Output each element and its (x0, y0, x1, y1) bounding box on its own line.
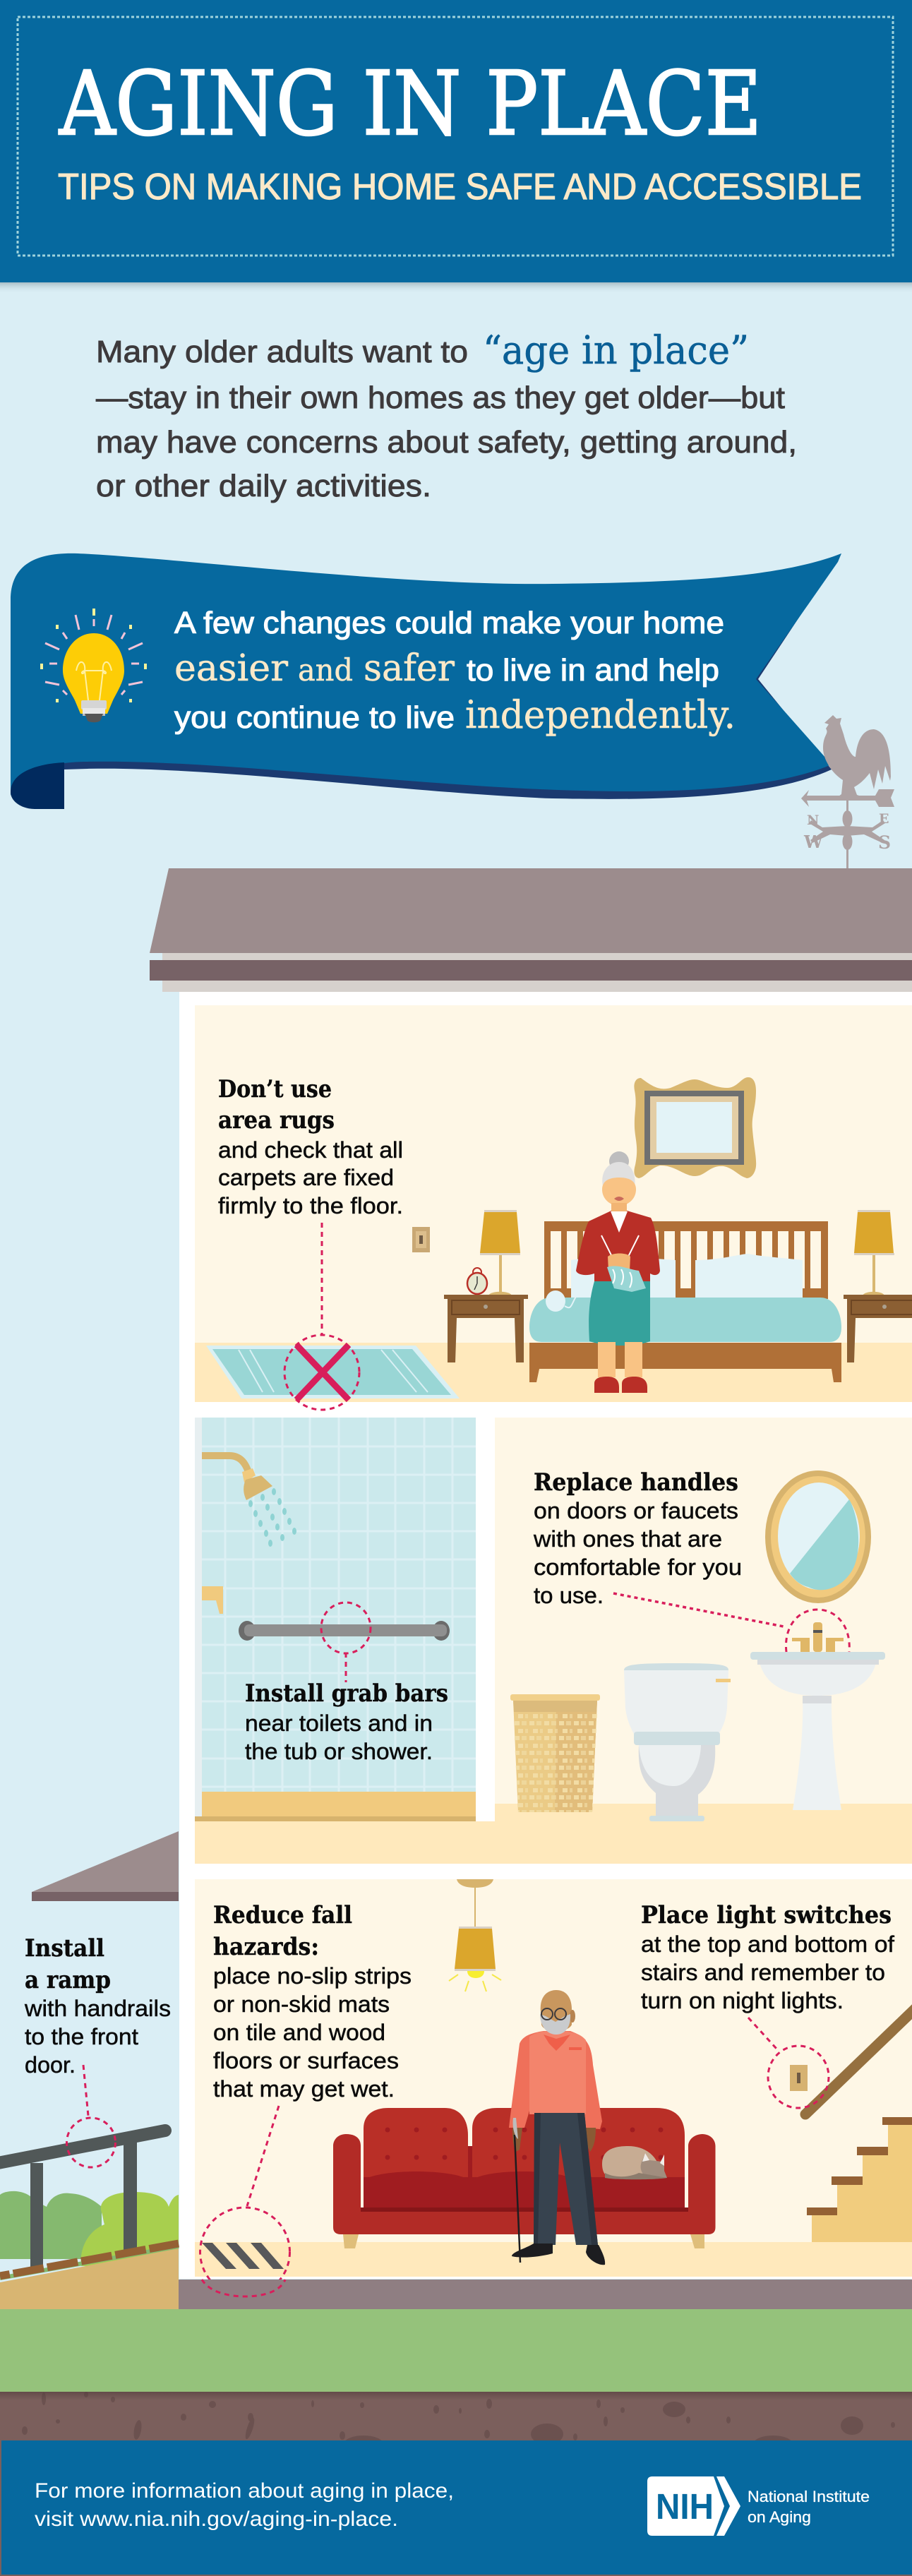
tip text: area rugs: firmly to the floor. (218, 1193, 403, 1218)
tip text: fall hazards: floors or surfaces (213, 2048, 399, 2073)
left lamp (480, 1210, 520, 1295)
tip text: light switches: Place light switches (641, 1901, 892, 1929)
tip text: fall hazards: on tile and wood (213, 2020, 385, 2045)
tip text: area rugs: and check that all (218, 1137, 403, 1163)
tip text: light switches: stairs and remember to (641, 1960, 885, 1985)
pedestal sink (750, 1622, 885, 1810)
tip text: light switches: at the top and bottom of (641, 1931, 894, 1957)
intro text block: —stay in their own homes as they get older—but (96, 381, 785, 415)
tip text: light switches: turn on night lights. (641, 1988, 844, 2013)
banner text: you continue to live (174, 700, 455, 735)
tip text: handles: with ones that are (533, 1526, 722, 1552)
weather vane: S (878, 832, 891, 853)
intro text block: may have concerns about safety, getting around, (96, 425, 797, 460)
icon: shower head (202, 1452, 296, 1547)
banner text: and (298, 653, 353, 688)
title: AGING IN PLACE (59, 53, 762, 155)
toilet (624, 1663, 731, 1821)
callout circle: stripes (200, 2207, 289, 2296)
intro text block: “age in place” (483, 328, 749, 373)
laundry hamper (510, 1694, 600, 1812)
tip text: grab bars (245, 1679, 448, 1764)
grass (0, 2309, 912, 2392)
callout line: rug (320, 1223, 323, 1334)
bathtub edge (195, 1792, 476, 1821)
footer text (35, 2479, 454, 2531)
tip text: ramp: a ramp (25, 1966, 111, 1994)
bushes (0, 2191, 179, 2266)
footer (1, 2440, 912, 2575)
banner text: to live in and help (467, 653, 719, 688)
tip text: handles (533, 1468, 742, 1608)
area rug (206, 1346, 460, 1398)
weather vane: E (879, 811, 889, 827)
banner text: safer (364, 647, 455, 690)
faucet (792, 1622, 844, 1652)
red sofa (333, 2108, 716, 2248)
tip text: ramp: to the front (25, 2024, 138, 2049)
tip text: area rugs (218, 1075, 403, 1218)
panel: bedroom (195, 1005, 912, 1410)
intro text block: or other daily activities. (96, 469, 431, 503)
intro text block: Many older adults want to (96, 335, 468, 369)
elderly woman knitting (546, 1151, 660, 1393)
pendant lamp (449, 1879, 501, 1991)
alarm clock (467, 1268, 487, 1294)
tip text: area rugs: carpets are fixed (218, 1165, 394, 1190)
tip text: handles: to use. (534, 1583, 604, 1608)
weather vane: N (807, 813, 819, 828)
house roof (150, 868, 912, 992)
ribbon banner (11, 553, 841, 809)
panel: exterior ramp (0, 1934, 179, 2309)
soil (0, 2392, 912, 2576)
handrail (0, 2131, 165, 2164)
older man with cane (509, 1990, 605, 2265)
footer text: For more information about aging in place, (35, 2479, 454, 2503)
tip text: ramp: door. (25, 2052, 76, 2078)
house walls (179, 992, 912, 2279)
tip text: grab bars: the tub or shower. (245, 1739, 433, 1764)
callout line: switch (748, 2018, 776, 2049)
tip text: ramp: with handrails (24, 1996, 171, 2021)
banner text (174, 606, 736, 737)
right lamp (854, 1210, 894, 1295)
callout line: grab bar (344, 1653, 347, 1682)
tip text: fall hazards (213, 1901, 412, 2102)
header banner (0, 0, 912, 294)
tip text: fall hazards: place no-slip strips (213, 1963, 412, 1989)
mirror (765, 1470, 871, 1603)
tip text: light switches (641, 1901, 894, 2013)
right nightstand (844, 1295, 912, 1362)
icon: light bulb (42, 609, 145, 722)
tip text: fall hazards: or non-skid mats (213, 1991, 390, 2017)
tip text: fall hazards: that may get wet. (213, 2076, 395, 2102)
weather vane: W (803, 832, 824, 852)
wall light switch (412, 1227, 430, 1252)
tip text: fall hazards: Reduce fall (213, 1901, 352, 1929)
NIH logo (647, 2476, 870, 2536)
shower control (202, 1586, 223, 1614)
ramp (0, 2248, 179, 2309)
tip text: handles: on doors or faucets (534, 1498, 738, 1523)
callout circle: handrail (66, 2118, 116, 2167)
banner text: easier (174, 647, 288, 690)
tip text: handles: Replace handles (534, 1468, 738, 1497)
stair rail (805, 2006, 912, 2114)
non-slip stripes (202, 2243, 284, 2269)
tip text: handles: comfortable for you (534, 1554, 742, 1580)
tip text: ramp: Install (25, 1934, 104, 1963)
subtitle: TIPS ON MAKING HOME SAFE AND ACCESSIBLE (58, 167, 862, 208)
callout circle: switch (768, 2046, 829, 2108)
tip text: area rugs: Don’t use (218, 1075, 332, 1103)
left nightstand (444, 1295, 528, 1362)
handrail posts (30, 2139, 137, 2270)
NIH logo: National Institute (748, 2488, 870, 2505)
NIH logo: NIH (656, 2486, 714, 2527)
panel: bathroom sink area (195, 1418, 912, 1864)
banner text: A few changes could make your home (174, 606, 724, 640)
footer text: visit www.nia.nih.gov/aging-in-place. (35, 2508, 398, 2531)
panel: living room (195, 1879, 912, 2296)
callout line: faucet (613, 1593, 784, 1627)
weather vane (801, 715, 894, 868)
callout line: handrail (83, 2065, 88, 2116)
tip text: area rugs: area rugs (218, 1106, 335, 1134)
callout line: stripes (247, 2106, 279, 2206)
intro text block (96, 328, 797, 503)
tip text: ramp (24, 1934, 171, 2078)
picture frame (634, 1077, 756, 1178)
wall switch (790, 2065, 808, 2091)
callout circle: faucet (786, 1610, 849, 1652)
porch roof (32, 1831, 179, 1901)
tip text: fall hazards: hazards: (213, 1933, 319, 1961)
callout circle: rug (284, 1335, 359, 1410)
red X over rug (296, 1345, 349, 1400)
panel: bathroom shower (195, 1418, 476, 1821)
banner text: independently. (465, 693, 736, 737)
house foundation (179, 2280, 912, 2309)
tip text: grab bars: Install grab bars (245, 1679, 448, 1708)
grab bar (239, 1621, 450, 1641)
callout circle: grab bar (321, 1602, 371, 1653)
tip text: grab bars: near toilets and in (245, 1711, 433, 1736)
cat on sofa (602, 2146, 667, 2179)
NIH logo: on Aging (748, 2508, 811, 2526)
bed (529, 1221, 841, 1382)
stairs (807, 2117, 912, 2242)
